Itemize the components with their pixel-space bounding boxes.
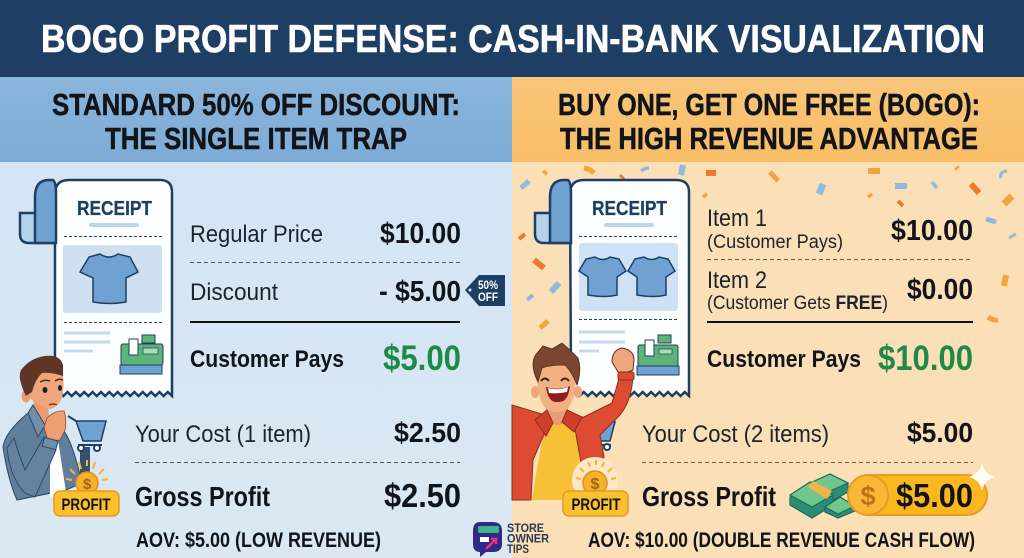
text: right price rows: $0.00 xyxy=(907,274,973,306)
receipt: left xyxy=(20,180,172,396)
logo: store owner tips: TIPS xyxy=(507,542,529,556)
icon: cash register xyxy=(120,335,163,374)
text: left price rows xyxy=(135,218,461,552)
text: right price rows: (Customer Gets FREE) xyxy=(707,293,888,314)
logo: store owner tips: OWNER xyxy=(507,532,549,546)
heading: standard discount: THE SINGLE ITEM TRAP xyxy=(105,121,407,156)
panel: left background xyxy=(0,162,512,558)
ears xyxy=(531,386,539,398)
character: thinking man xyxy=(3,356,82,500)
text: left price rows: $2.50 xyxy=(384,477,461,514)
text: right price rows: Item 1 xyxy=(707,205,767,232)
icon: shopping cart left xyxy=(68,416,106,483)
panel: right background xyxy=(512,162,1024,558)
receipt: right xyxy=(535,180,689,396)
heading: standard discount xyxy=(0,77,512,162)
mouth xyxy=(49,404,57,405)
tag: 50% off xyxy=(465,275,505,306)
text: right price rows: $5.00 xyxy=(907,417,973,448)
jacket left xyxy=(512,405,548,500)
icon: t-shirt 2 xyxy=(628,257,675,296)
icon: cash register xyxy=(637,335,679,375)
mouth xyxy=(546,386,570,402)
text: left price rows: Regular Price xyxy=(190,221,323,248)
badge: profit left xyxy=(54,460,119,516)
neck xyxy=(33,398,50,427)
arm xyxy=(7,437,56,497)
badge: profit left: PROFIT xyxy=(62,496,110,514)
text: right price rows: Item 2 xyxy=(707,267,767,294)
shirt xyxy=(50,440,66,497)
text: left price rows: Your Cost (1 item) xyxy=(135,421,311,448)
logo: store owner tips: STORE xyxy=(507,521,544,535)
icon: cash stacks xyxy=(790,474,855,518)
neck xyxy=(546,405,568,425)
shirt xyxy=(532,420,584,500)
hair xyxy=(20,356,63,396)
logo: store owner tips xyxy=(473,521,549,557)
pill: profit value xyxy=(848,475,987,515)
badge: profit right xyxy=(563,457,628,516)
collars xyxy=(535,410,553,436)
tag: 50% off: 50% xyxy=(478,278,498,292)
text: left price rows: Gross Profit xyxy=(135,481,270,512)
text: right price rows: Gross Profit xyxy=(642,481,776,512)
icon: t-shirt 1 xyxy=(579,257,626,296)
text: right price rows xyxy=(588,205,975,552)
pill: profit value: $5.00 xyxy=(896,477,973,514)
icon: t-shirt xyxy=(80,254,138,304)
hand xyxy=(44,411,66,441)
pill: profit value: $ xyxy=(860,481,876,511)
text: left price rows: - $5.00 xyxy=(379,276,461,308)
text: right price rows: (Customer Pays) xyxy=(707,232,843,253)
text: left price rows: $10.00 xyxy=(380,218,461,250)
confetti xyxy=(519,165,1016,328)
badge: profit left: $ xyxy=(83,476,92,493)
text: left price rows: Discount xyxy=(190,279,278,306)
hair xyxy=(533,343,580,385)
eyes xyxy=(541,378,569,381)
badge: profit right: PROFIT xyxy=(572,496,620,514)
text: right price rows: $10.00 xyxy=(891,215,973,247)
text: left price rows: $2.50 xyxy=(394,417,461,448)
badge: profit right: $ xyxy=(591,476,600,493)
character: cheering man xyxy=(512,343,634,500)
heading: BOGO xyxy=(512,77,1024,162)
text: left price rows: $5.00 xyxy=(383,339,461,378)
jacket right and raised arm xyxy=(573,375,633,490)
icon: shopping cart right xyxy=(584,422,615,450)
tag: 50% off: OFF xyxy=(478,290,498,304)
receipt: left: RECEIPT xyxy=(77,198,152,220)
heading: standard discount: STANDARD 50% OFF DISCOUNT: xyxy=(52,87,460,122)
title banner xyxy=(0,0,1024,77)
eyes xyxy=(42,387,48,393)
text: right price rows: Your Cost (2 items) xyxy=(642,421,829,448)
text: right price rows: Customer Pays xyxy=(707,346,861,373)
head xyxy=(25,366,64,409)
jacket xyxy=(3,413,82,500)
text: left price rows: Customer Pays xyxy=(190,346,344,373)
head xyxy=(537,362,576,412)
collar xyxy=(28,405,45,437)
text: left price rows: AOV: $5.00 (LOW REVENUE) xyxy=(136,529,381,552)
receipt: right: RECEIPT xyxy=(592,198,667,220)
fist xyxy=(612,348,634,373)
text: right price rows: $10.00 xyxy=(878,339,973,378)
icon: sparkle xyxy=(969,463,995,491)
